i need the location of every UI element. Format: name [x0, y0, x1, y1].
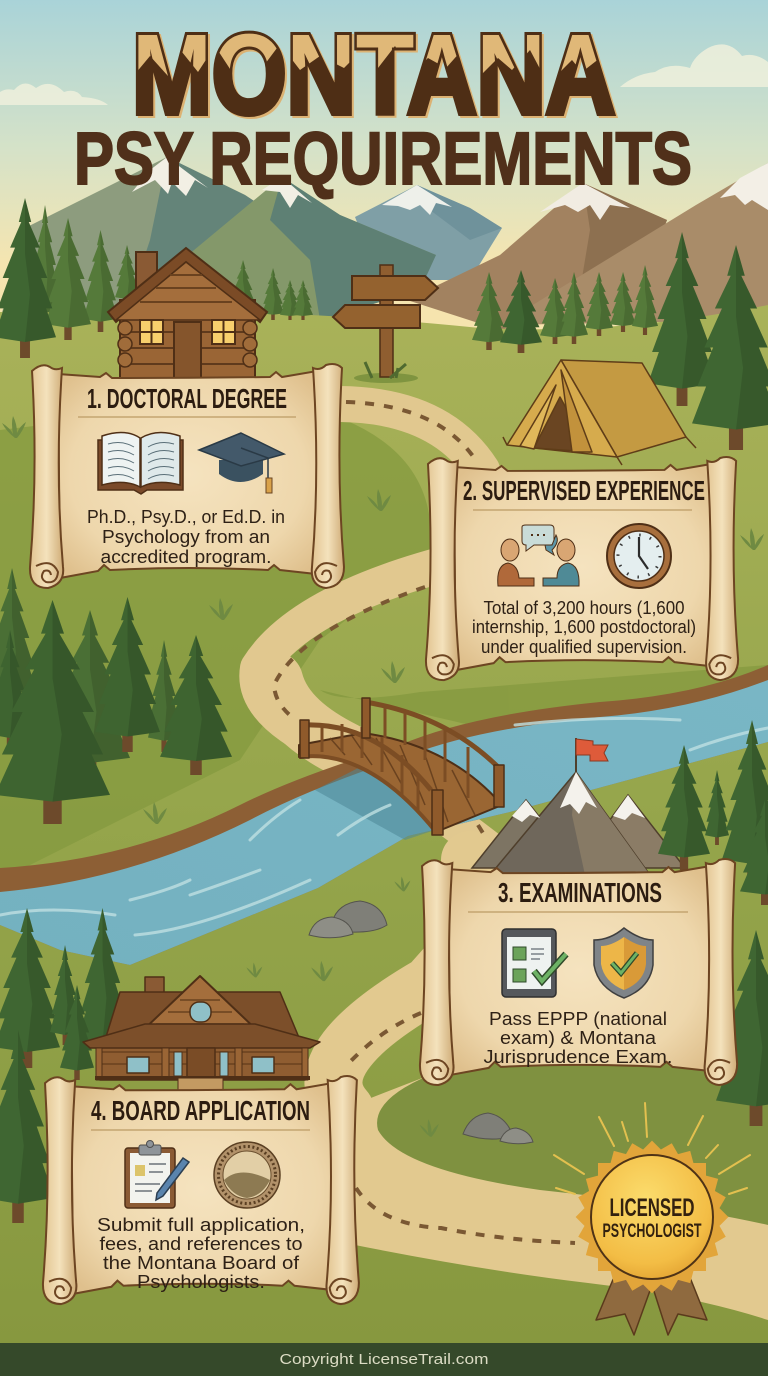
footbridge — [299, 698, 504, 835]
lodge — [83, 976, 320, 1090]
text: step 4 description — [97, 1214, 305, 1292]
lower hill — [377, 1040, 768, 1225]
text: step 3 description: exam) & Montana — [500, 1027, 657, 1048]
sky background — [0, 0, 768, 330]
badge: licensed psychologist — [554, 1103, 750, 1335]
dirt trail — [257, 404, 490, 1170]
tent — [503, 360, 696, 465]
title line 1: MONTANA — [132, 11, 615, 137]
gold disc — [591, 1155, 713, 1279]
text: step 3 description: Jurisprudence Exam. — [484, 1046, 672, 1067]
icon: clipboard and pen — [125, 1140, 189, 1208]
title — [74, 11, 692, 200]
text: step 1 description: Ph.D., Psy.D., or Ed.D. in — [87, 506, 285, 527]
text: step 1 description — [87, 506, 285, 567]
icon: state seal — [214, 1142, 280, 1208]
icon: clock — [607, 524, 671, 588]
text: step 3 description — [484, 1008, 672, 1067]
pine trees: lower left grove — [0, 908, 127, 1223]
text: step 2 description: internship, 1,600 postdoctoral) — [472, 616, 696, 637]
starburst seal — [576, 1141, 728, 1293]
badge text — [602, 1194, 702, 1242]
rocks — [309, 901, 533, 1144]
heading: step 4: 4. BOARD APPLICATION — [91, 1095, 310, 1126]
ground — [0, 305, 768, 1343]
panel: step 3 examinations — [420, 859, 737, 1085]
log cabin — [108, 248, 267, 380]
heading: step 1: 1. DOCTORAL DEGREE — [87, 383, 287, 414]
footer bar — [0, 1343, 768, 1376]
panel: step 2 supervised experience — [426, 457, 738, 680]
grass tufts — [2, 416, 764, 1137]
trail dashes — [274, 402, 575, 1243]
text: step 2 description: Total of 3,200 hours (1,600 — [484, 597, 684, 618]
clouds — [0, 44, 768, 105]
text: step 3 description: Pass EPPP (national — [489, 1008, 667, 1029]
pine trees: upper groves — [0, 198, 768, 450]
meadow shading — [0, 414, 768, 880]
icon: tablet checklist — [502, 929, 566, 997]
copyright text: Copyright LicenseTrail.com — [280, 1351, 488, 1368]
panel: step 4 board application — [43, 1076, 359, 1304]
heading: step 3: 3. EXAMINATIONS — [498, 877, 662, 908]
text: step 4 description: Submit full application, — [97, 1214, 305, 1235]
summit mountain with flag — [472, 738, 685, 875]
pine trees: right grove by the summit — [658, 720, 768, 1126]
ribbons — [596, 1270, 707, 1335]
river — [0, 665, 768, 965]
wooden signpost — [333, 265, 438, 383]
lower trail band — [340, 1075, 768, 1320]
icon: shield with check — [594, 928, 653, 998]
distant mountains — [0, 157, 768, 330]
text: step 1 description: Psychology from an — [102, 526, 270, 547]
text: step 4 description: Psychologists. — [137, 1271, 265, 1292]
sun rays — [554, 1103, 750, 1194]
pine trees: middle left grove — [0, 568, 180, 780]
text: step 4 description: the Montana Board of — [103, 1252, 300, 1273]
text: step 2 description — [472, 597, 696, 657]
text: step 1 description: accredited program. — [100, 546, 272, 567]
panel: step 1 doctoral degree — [30, 364, 344, 588]
text: step 2 description: under qualified supervision. — [481, 636, 687, 657]
icon: graduation cap — [199, 433, 284, 493]
badge text: PSYCHOLOGIST — [602, 1221, 702, 1242]
text: step 4 description: fees, and references to — [100, 1233, 302, 1254]
badge text: LICENSED — [610, 1194, 694, 1222]
icon: two people talking — [498, 525, 579, 586]
background tree line — [30, 205, 658, 350]
icon: open book — [98, 432, 183, 494]
